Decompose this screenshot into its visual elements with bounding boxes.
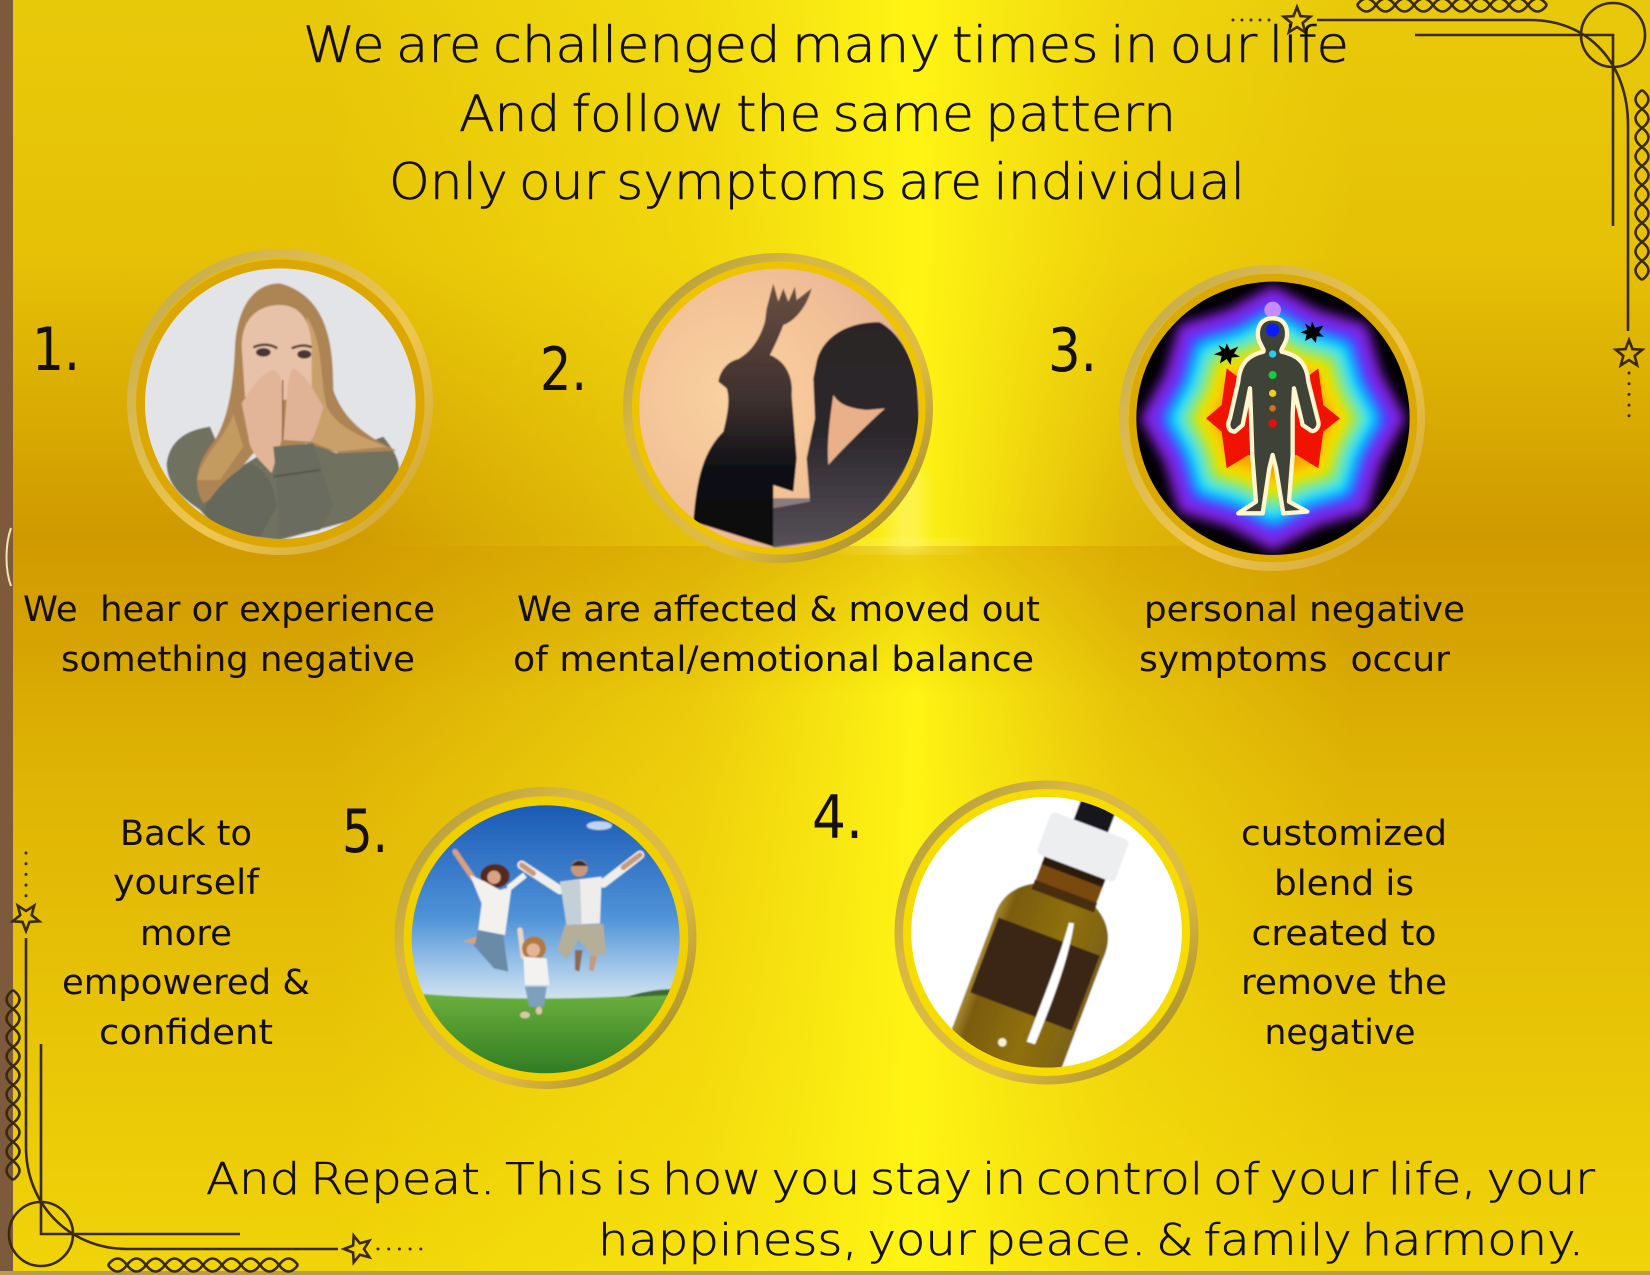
step 2: number: 2.	[540, 335, 587, 405]
step 5: caption: confident	[99, 1013, 273, 1053]
step 4: number: 4.	[812, 783, 863, 853]
closing statement: happiness, your peace. & family harmony.	[598, 1215, 1584, 1266]
step 3: caption	[1139, 590, 1465, 680]
step 3: number: 3.	[1048, 316, 1097, 386]
title: Only our symptoms are individual	[389, 153, 1245, 211]
step 2: caption: We are affected & moved out	[517, 590, 1040, 630]
step 4: caption: remove the	[1241, 963, 1447, 1003]
step 5: caption: Back to	[120, 814, 252, 854]
step 4: caption: blend is	[1274, 864, 1414, 904]
step 1: caption	[23, 590, 435, 680]
ornament: top-right corner	[1233, 0, 1648, 418]
step 4: caption: negative	[1264, 1013, 1416, 1053]
step 5: caption: empowered &	[62, 963, 310, 1003]
step 5: photo of jumping family	[399, 792, 692, 1084]
ornament: bottom-left corner	[6, 853, 423, 1272]
step 3: caption: symptoms occur	[1139, 640, 1451, 680]
title	[303, 16, 1349, 211]
title: And follow the same pattern	[459, 85, 1176, 143]
step 1: caption: We hear or experience	[23, 590, 435, 630]
step 5: caption: yourself	[113, 863, 260, 903]
step 4: caption	[1241, 814, 1447, 1053]
step 1: number: 1.	[32, 315, 80, 385]
step 4: caption: customized	[1241, 814, 1447, 854]
closing statement	[206, 1154, 1596, 1266]
step 3: aura body illustration	[1124, 270, 1420, 566]
step 2: caption: of mental/emotional balance	[513, 640, 1034, 680]
step 4: caption: created to	[1252, 914, 1436, 954]
step 4: photo of amber dropper bottle	[899, 779, 1194, 1085]
step 5: number: 5.	[342, 797, 388, 867]
step 5: caption	[62, 814, 310, 1053]
title: We are challenged many times in our life	[303, 16, 1349, 74]
step 1: photo of shocked woman	[132, 254, 428, 550]
step 1: caption: something negative	[61, 640, 415, 680]
step 3: caption: personal negative	[1144, 590, 1465, 630]
step 2: photo of two silhouetted women	[628, 258, 928, 558]
step 5: caption: more	[140, 914, 232, 954]
step 2: caption	[513, 590, 1040, 680]
closing statement: And Repeat. This is how you stay in control of your life, your	[206, 1154, 1596, 1205]
